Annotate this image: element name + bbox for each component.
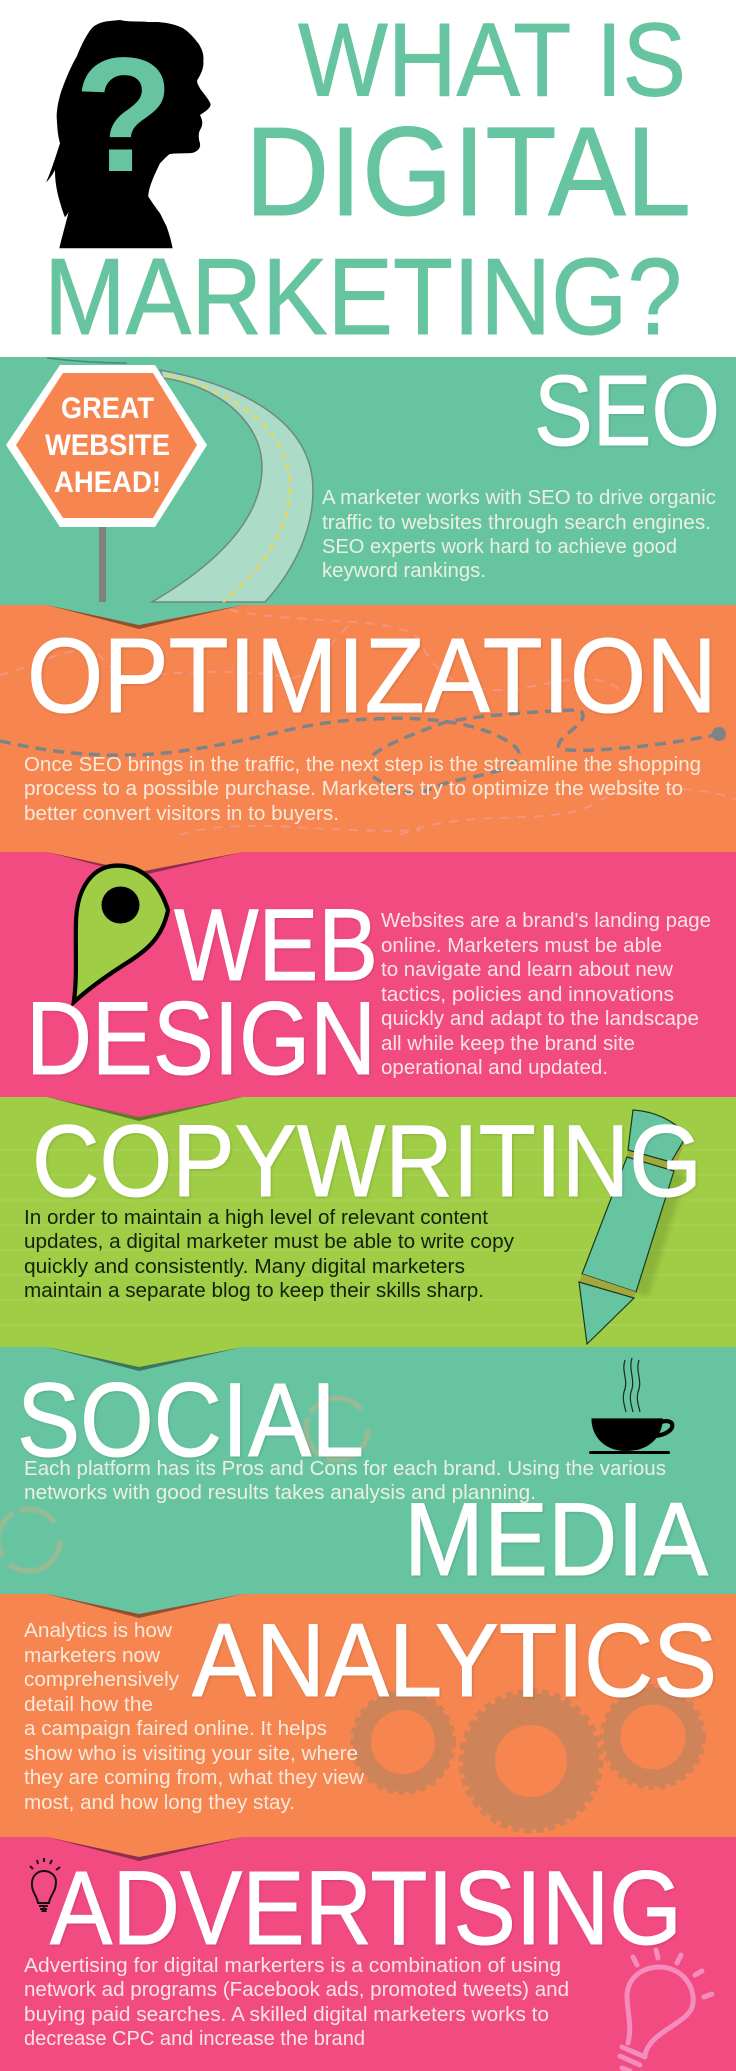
- icon: pencil: [579, 1110, 687, 1344]
- text: analytics body: Analytics is how: [24, 1620, 173, 1642]
- panel: advertising: [0, 1837, 736, 2071]
- icon: large pale light bulb: [620, 1950, 712, 2071]
- chevron: [47, 852, 243, 876]
- icon: gears: [353, 1687, 703, 1830]
- text: SEO body: traffic to websites through search engines.: [322, 512, 711, 534]
- panel: web design: [0, 852, 736, 1097]
- chevron: [47, 1347, 243, 1371]
- text: analytics body: a campaign faired online. It helps: [24, 1718, 327, 1740]
- icon: head silhouette with question mark: [46, 20, 211, 248]
- icon: winding road: [47, 358, 313, 602]
- panel: copywriting: [0, 1097, 736, 1347]
- text: analytics body: show who is visiting your site, where: [24, 1743, 358, 1765]
- heading: web design: WEB: [174, 888, 378, 1002]
- text: web design body: [381, 910, 711, 1079]
- heading: web design: [26, 888, 378, 1097]
- text: copywriting body: updates, a digital marketer must be able to write copy: [24, 1231, 514, 1253]
- icon: road sign: [6, 365, 207, 602]
- text: copywriting body: [24, 1207, 514, 1302]
- title: what is digital marketing: WHAT IS: [298, 2, 686, 118]
- text: analytics body: detail how the: [24, 1694, 153, 1716]
- icon: dashed route: [0, 710, 726, 793]
- text: optimization body: Once SEO brings in the traffic, the next step is the streamline the shopping: [24, 754, 701, 776]
- chevron: [47, 1097, 243, 1121]
- text: advertising body: network ad programs (Facebook ads, promoted tweets) and: [24, 1979, 569, 2001]
- chevron: [47, 1837, 243, 1861]
- text: web design body: operational and updated.: [381, 1057, 608, 1079]
- header: title area: [44, 2, 691, 358]
- title: what is digital marketing: MARKETING?: [44, 236, 682, 358]
- text: SEO body: keyword rankings.: [322, 560, 486, 582]
- icon: head silhouette with question mark: ?: [74, 23, 174, 206]
- decoration: pale dashed paths: [0, 610, 736, 835]
- chevron: [47, 605, 243, 629]
- text: analytics body: marketers now: [24, 1645, 161, 1667]
- text: web design body: all while keep the brand site: [381, 1033, 635, 1055]
- text: optimization body: better convert visitors in to buyers.: [24, 803, 339, 825]
- text: copywriting body: In order to maintain a high level of relevant content: [24, 1207, 488, 1229]
- heading: social media: [17, 1362, 709, 1598]
- heading: social media: SOCIAL: [17, 1362, 364, 1479]
- icon: small light bulb: [30, 1858, 60, 1912]
- panel: optimization: [0, 605, 736, 852]
- chevron: [47, 1594, 243, 1618]
- title: what is digital marketing: [44, 2, 691, 358]
- heading: web design: DESIGN: [26, 981, 376, 1097]
- text: social media body: networks with good results takes analysis and planning.: [24, 1482, 536, 1504]
- text: SEO body: [322, 487, 716, 582]
- text: SEO body: A marketer works with SEO to drive organic: [322, 487, 716, 509]
- text: social media body: [24, 1458, 666, 1504]
- text: analytics body: comprehensively: [24, 1669, 179, 1691]
- icon: road sign: AHEAD!: [54, 466, 161, 499]
- text: web design body: tactics, policies and innovations: [381, 984, 674, 1006]
- text: web design body: quickly and adapt to the landscape: [381, 1008, 699, 1030]
- text: analytics body: they are coming from, what they view: [24, 1767, 365, 1789]
- text: advertising body: Advertising for digital markerters is a combination of using: [24, 1955, 561, 1977]
- text: SEO body: SEO experts work hard to achieve good: [322, 536, 677, 558]
- text: web design body: Websites are a brand's landing page: [381, 910, 711, 932]
- panel: SEO: [0, 355, 736, 605]
- panel: analytics: [0, 1594, 736, 1837]
- text: advertising body: [24, 1955, 569, 2050]
- text: optimization body: process to a possible purchase. Marketers try to optimize the website to: [24, 778, 683, 800]
- text: analytics body: most, and how long they stay.: [24, 1792, 295, 1814]
- icon: road sign: GREAT: [61, 392, 154, 425]
- heading: social media: MEDIA: [404, 1482, 709, 1598]
- title: what is digital marketing: DIGITAL: [245, 101, 691, 242]
- text: advertising body: decrease CPC and increase the brand: [24, 2028, 365, 2050]
- text: advertising body: buying paid searches. A skilled digital marketers works to: [24, 2004, 549, 2026]
- text: web design body: online. Marketers must be able: [381, 935, 662, 957]
- text: copywriting body: maintain a separate blog to keep their skills sharp.: [24, 1280, 484, 1302]
- text: copywriting body: quickly and consistently. Many digital marketers: [24, 1256, 465, 1278]
- text: analytics body: [24, 1620, 365, 1814]
- icon: road sign: WEBSITE: [45, 429, 170, 462]
- decoration: coffee rings: [0, 1398, 368, 1571]
- panel: social media: [0, 1347, 736, 1598]
- text: web design body: to navigate and learn about new: [381, 959, 674, 981]
- text: optimization body: [24, 754, 701, 825]
- text: social media body: Each platform has its Pros and Cons for each brand. Using the various: [24, 1458, 666, 1480]
- icon: map pin: [74, 866, 168, 1002]
- icon: coffee cup: [589, 1358, 672, 1454]
